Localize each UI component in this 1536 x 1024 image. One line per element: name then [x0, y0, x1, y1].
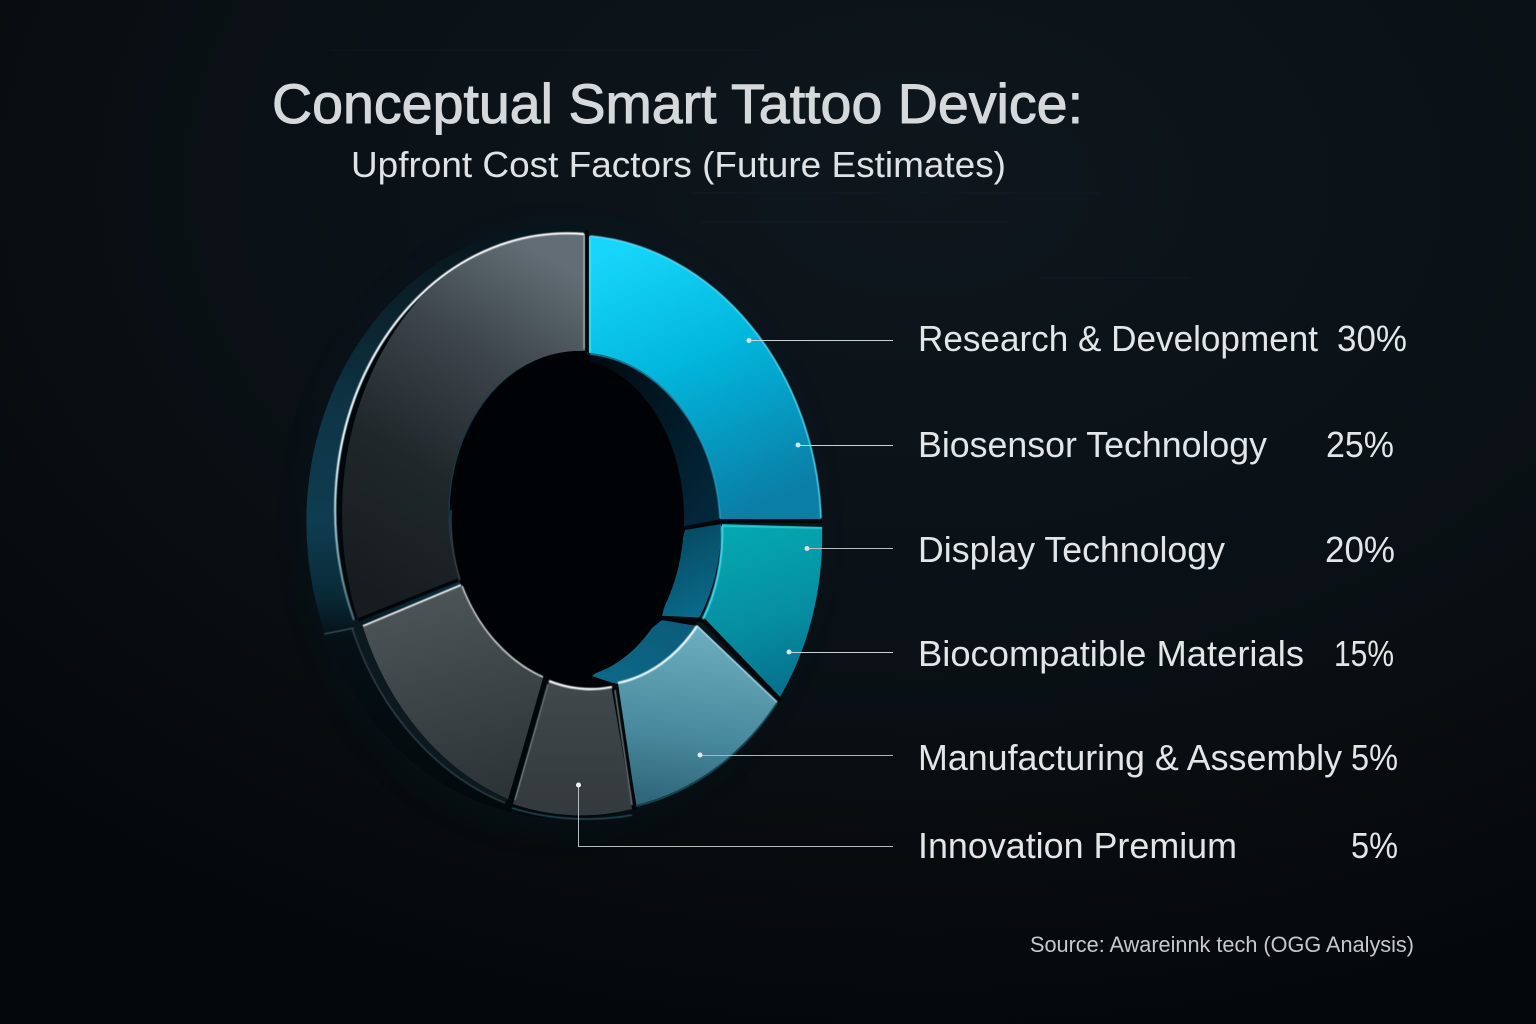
leader line: Biosensor Technology	[796, 442, 893, 448]
source note: Source: Awareinnk tech (OGG Analysis)	[1030, 932, 1414, 957]
leader line: Manufacturing and Assembly	[698, 752, 893, 758]
label: Innovation Premium	[918, 825, 1398, 866]
label: Biocompatible Materials: 15%	[1334, 633, 1394, 674]
dark backing for the hole	[436, 339, 736, 700]
extruded back ring	[306, 225, 640, 819]
segment: Display Technology	[702, 524, 822, 697]
leader line: Innovation Premium	[576, 782, 893, 846]
segment seams	[358, 230, 822, 810]
rim highlights	[324, 233, 822, 819]
segment: Biocompatible Materials	[618, 625, 777, 805]
glow behind donut	[315, 240, 805, 820]
label: Manufacturing and Assembly: Manufacturing & Assembly	[918, 737, 1342, 778]
label: Biocompatible Materials: Biocompatible Materials	[918, 633, 1304, 674]
title: Conceptual Smart Tattoo Device:	[272, 72, 1083, 135]
subtitle: Upfront Cost Factors (Future Estimates)	[351, 144, 1006, 185]
donut chart	[306, 225, 822, 820]
leader line: Display Technology	[804, 546, 893, 551]
label: Manufacturing and Assembly: 5%	[1351, 737, 1398, 778]
label: Display Technology: 20%	[1325, 529, 1395, 570]
inner wall: teal segment	[662, 524, 721, 620]
label: Innovation Premium: 5%	[1351, 825, 1398, 866]
segment: Manufacturing and Assembly	[352, 586, 544, 803]
label: Display Technology: Display Technology	[918, 529, 1225, 570]
label: Display Technology	[918, 529, 1395, 570]
label: Biosensor Technology: Biosensor Technology	[918, 424, 1267, 465]
segment: Innovation Premium	[513, 682, 632, 815]
gap between rim and dark face	[336, 298, 420, 620]
inner wall: cyan segment	[589, 353, 721, 527]
donut hole	[450, 358, 684, 678]
inner wall: light blue segment	[592, 620, 697, 684]
label: Innovation Premium: Innovation Premium	[918, 825, 1237, 866]
segment: Research and Development	[589, 236, 821, 519]
leader line: Biocompatible Materials	[786, 650, 893, 654]
label: Research and Development: Research & Development	[918, 318, 1318, 359]
label: Research and Development: 30%	[1337, 318, 1407, 359]
segment: largest dark segment	[338, 233, 585, 618]
label: Biosensor Technology: 25%	[1326, 424, 1394, 465]
leader line: Research and Development	[746, 338, 893, 343]
